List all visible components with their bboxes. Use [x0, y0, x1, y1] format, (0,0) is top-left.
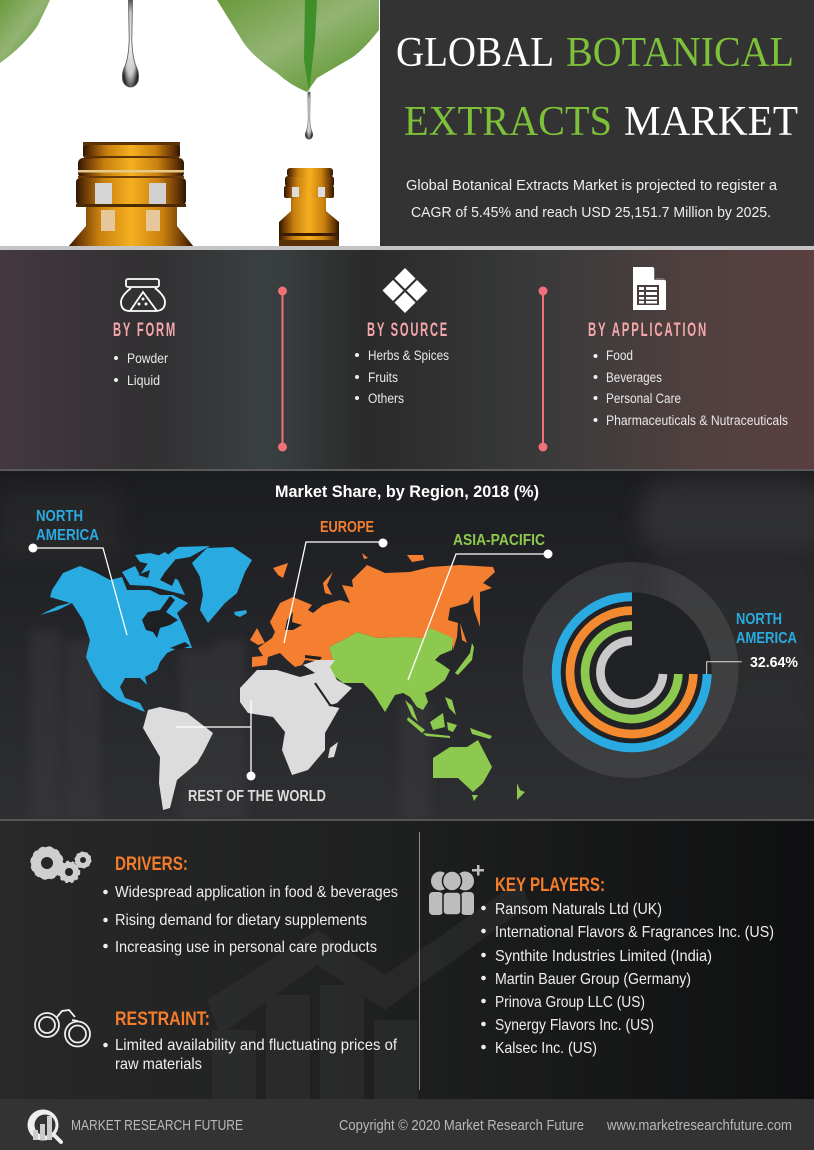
heading: by application: BY APPLICATION: [588, 320, 708, 341]
list: key players: Prinova Group LLC (US): [495, 994, 645, 1011]
title: MARKET: [624, 99, 798, 145]
panel: market segments: [0, 250, 814, 470]
divider: right timeline: [538, 286, 548, 452]
list: sources: [355, 348, 449, 406]
callout: North America: NORTH: [36, 508, 83, 525]
icon: right leaf: [217, 0, 379, 92]
title: BOTANICAL: [566, 30, 794, 76]
list: applications: Pharmaceuticals & Nutraceuticals: [606, 413, 788, 428]
list: drivers: Widespread application in food & beverages: [115, 884, 398, 901]
icon: document: [633, 267, 666, 310]
callout: North America: AMERICA: [36, 527, 99, 544]
callout: Rest of the World: [176, 700, 326, 805]
text: website: www.marketresearchfuture.com: [606, 1117, 792, 1134]
divider: left timeline: [278, 286, 287, 452]
list: key players: International Flavors & Fragrances Inc. (US): [495, 924, 774, 941]
map: rest of the world: [143, 660, 352, 810]
heading: key players: KEY PLAYERS:: [495, 875, 605, 896]
icon: powder jar: [121, 279, 165, 311]
list: applications: Personal Care: [606, 391, 681, 406]
callout: donut North America value: [707, 611, 798, 674]
icon: handcuffs: [35, 1010, 90, 1046]
list: restraint: [103, 1037, 398, 1073]
divider: [419, 832, 420, 1090]
callout: Asia-Pacific: ASIA-PACIFIC: [453, 532, 545, 549]
panel: title header: [380, 0, 814, 247]
callout: donut North America value: NORTH: [736, 611, 782, 628]
list: applications: Beverages: [606, 370, 662, 385]
title: GLOBAL: [396, 30, 554, 76]
heading: restraint: RESTRAINT:: [115, 1009, 210, 1030]
heading: by source: BY SOURCE: [367, 320, 449, 341]
title: EXTRACTS: [404, 99, 612, 145]
list: drivers: Rising demand for dietary supplements: [115, 912, 367, 929]
list: key players: Synthite Industries Limited (India): [495, 948, 712, 965]
text: brand name: MARKET RESEARCH FUTURE: [71, 1117, 243, 1134]
callout: donut North America value: AMERICA: [736, 630, 797, 647]
icon: gears: [32, 848, 90, 882]
list: drivers: [103, 884, 398, 956]
icon: diamond: [382, 268, 428, 313]
column: by source: [355, 268, 449, 406]
panel: drivers, restraint and key players: [0, 821, 814, 1100]
list: forms: [114, 351, 168, 388]
list: key players: Martin Bauer Group (Germany): [495, 971, 691, 988]
list: key players: Synergy Flavors Inc. (US): [495, 1017, 654, 1034]
text block: summary: Global Botanical Extracts Market is projected to register a: [406, 177, 778, 194]
list: drivers: Increasing use in personal care products: [115, 939, 377, 956]
list: applications: Food: [606, 348, 633, 363]
list: sources: Others: [368, 391, 404, 406]
icon: small water drop: [305, 92, 313, 139]
list: sources: Herbs & Spices: [368, 348, 449, 363]
list: key players: Ransom Naturals Ltd (UK): [495, 901, 662, 918]
chart: radial share donut: [522, 562, 738, 778]
text: copyright: Copyright © 2020 Market Research Future: [339, 1117, 584, 1134]
map: Europe and Russia: [250, 553, 495, 667]
column: by form: [113, 279, 177, 388]
list: sources: Fruits: [368, 370, 398, 385]
list: key players: Kalsec Inc. (US): [495, 1040, 597, 1057]
panel: regional market share: [0, 471, 814, 820]
panel: footer: [0, 1099, 814, 1150]
callout: Rest of the World: REST OF THE WORLD: [188, 788, 326, 805]
heading: by form: BY FORM: [113, 320, 177, 341]
text block: summary: [406, 177, 778, 221]
heading: drivers: DRIVERS:: [115, 854, 188, 875]
list: restraint: Limited availability and fluctuating prices of: [115, 1037, 398, 1054]
chart title: Market Share, by Region, 2018 (%): [275, 483, 539, 501]
list: applications: [594, 348, 788, 428]
list: key players: [481, 901, 774, 1057]
icon: key players group: [429, 865, 484, 915]
icon: large amber bottle: [68, 142, 194, 247]
callout: Asia-Pacific: [408, 532, 552, 680]
column: by application: [588, 267, 788, 428]
icon: large water drop: [122, 0, 139, 87]
map: North America: [40, 546, 252, 712]
map: hudson bay and straits: [138, 570, 190, 650]
map: Baltic and Black seas: [285, 612, 322, 660]
title: [396, 30, 798, 145]
callout: Europe: [284, 519, 388, 643]
list: restraint: raw materials: [115, 1056, 202, 1073]
list: forms: Powder: [127, 351, 168, 366]
callout: Europe: EUROPE: [320, 519, 374, 536]
icon: left leaf: [0, 0, 50, 63]
map: Asia-Pacific: [328, 628, 525, 801]
text block: summary: CAGR of 5.45% and reach USD 25,151.7 Million by 2025.: [411, 204, 771, 221]
panel: hero photo: [0, 0, 380, 247]
list: forms: Liquid: [127, 373, 160, 388]
callout: North America: [28, 508, 127, 635]
callout: donut North America value: 32.64%: [750, 655, 798, 671]
icon: small amber bottle: [279, 168, 339, 247]
icon: MRFR logo: [28, 1110, 61, 1142]
